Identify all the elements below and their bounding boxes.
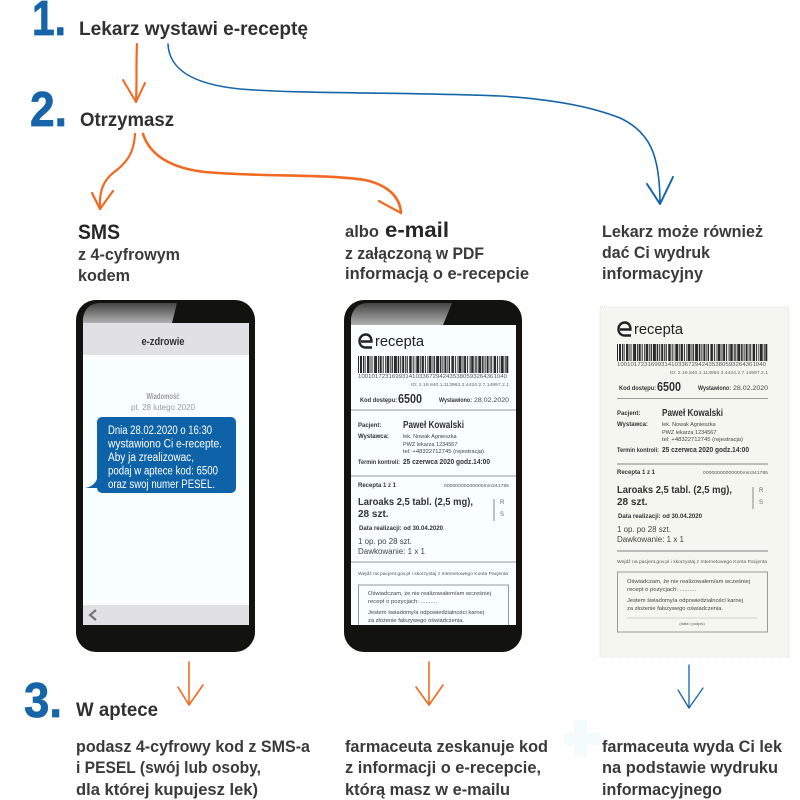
e-prescription document on paper: R: [759, 488, 764, 494]
text: pharmacy step for printout: [602, 738, 783, 799]
e-prescription document on phone: PWZ lekarza 1234567: [403, 442, 457, 448]
text: sender name: e-zdrowie: [142, 336, 184, 348]
icon: back chevron: [90, 610, 96, 620]
e-prescription document on phone: Paweł Kowalski: [403, 419, 464, 431]
text: pharmacy step for e-mail: farmaceuta zeskanuje kod: [345, 738, 548, 756]
heading: step 2: [30, 83, 174, 137]
text: pharmacy step for printout: farmaceuta wyda Ci lek: [602, 738, 783, 756]
heading: step 1: [32, 0, 308, 46]
e-prescription document on paper: S: [759, 500, 763, 506]
e-prescription document on phone: lek. Nowak Agnieszka: [403, 434, 457, 440]
e-prescription document on phone: 1 op. po 28 szt.: [358, 537, 412, 546]
text: pharmacy step for printout: informacyjnego: [602, 781, 722, 799]
heading: step 3: 3.: [24, 674, 62, 728]
e-prescription document on paper: za złożenie fałszywego oświadczenia.: [627, 606, 723, 612]
e-prescription document on paper: [617, 322, 769, 632]
e-prescription document on paper: tel: +48322712745 (rejestracja): [662, 437, 743, 443]
e-prescription document on paper: recept o pozycjach: ..........: [627, 587, 696, 593]
message bubble: podaj w aptece kod: 6500: [108, 466, 218, 478]
text: e-mail column heading: informacją o e-recepcie: [345, 265, 529, 283]
panel: phone with e-prescription PDF: [344, 300, 522, 652]
message bubble: Dnia 28.02.2020 o 16:30: [108, 425, 212, 437]
e-prescription document on paper: lek. Nowak Agnieszka: [662, 422, 716, 428]
text: SMS column heading: z 4-cyfrowym: [78, 246, 180, 264]
e-prescription document on phone: recepta: [375, 334, 425, 350]
e-prescription document on paper: Wejdź na pacjent.gov.pl i skorzystaj z Internetowego Konta Pacjenta: [617, 559, 768, 564]
e-prescription document on paper: 1 op. po 28 szt.: [617, 525, 671, 534]
text: pharmacy step for SMS: [76, 738, 311, 799]
arrow: step 1 to step 2: [123, 44, 145, 102]
e-prescription document on paper: PWZ lekarza 1234567: [662, 430, 716, 436]
e-prescription document on phone: za złożenie fałszywego oświadczenia.: [368, 618, 464, 624]
panel: phone with SMS: [76, 300, 255, 652]
e-prescription document on paper: 00000000000000mm341785: [703, 470, 769, 475]
e-prescription document on phone: 00000000000000mm341785: [444, 483, 510, 488]
e-prescription document on paper: Laroaks 2,5 tabl. (2,5 mg),: [617, 485, 732, 496]
e-prescription document on phone: Dawkowanie: 1 x 1: [358, 547, 426, 556]
text: pharmacy step for e-mail: [345, 738, 548, 799]
e-prescription document on paper: ID: 2.19.840.1.113993.3.4424.2.7.14997.2.1: [670, 370, 769, 375]
e-prescription document on paper: 28 szt.: [617, 497, 648, 508]
e-prescription document on paper: Wystawiono:: [698, 386, 731, 392]
heading: step 2: 2.: [30, 83, 67, 137]
e-prescription document on paper: Pacjent:: [617, 411, 640, 417]
e-prescription document on paper: Recepta 1 z 1: [617, 470, 656, 476]
text: printout column heading: Lekarz może również: [602, 223, 763, 241]
e-prescription document on paper: Paweł Kowalski: [662, 407, 723, 419]
e-prescription document on phone: Kod dostępu:: [360, 398, 397, 404]
heading: step 1: Lekarz wystawi e-receptę: [79, 19, 308, 40]
text: SMS column heading: [78, 221, 180, 285]
e-prescription document on paper: 25 czerwca 2020 godz.14:00: [662, 447, 749, 454]
e-prescription document on paper: Jestem świadomy/a odpowiedzialności karnej: [627, 598, 743, 604]
message bubble: wystawiono Ci e-recepte.: [107, 438, 222, 450]
e-prescription document on phone: ID: 2.19.840.1.113993.3.4424.2.7.14997.2.1: [411, 382, 510, 387]
text: pharmacy step for SMS: dla której kupujesz lek): [76, 781, 258, 799]
e-prescription document on paper: recepta: [634, 322, 684, 338]
e-prescription document on phone: 28 szt.: [358, 509, 389, 520]
decorative pale cross: [564, 720, 600, 757]
text: e-mail column heading: [345, 219, 529, 283]
message bubble: oraz swoj numer PESEL.: [108, 479, 215, 491]
arrow: to e-mail: [143, 134, 401, 213]
e-prescription document on phone: recept o pozycjach: ..........: [368, 599, 437, 605]
e-prescription document on phone: Oświadczam, że nie realizowałem/am wcześniej: [368, 591, 491, 597]
e-prescription document on paper: Termin kontroli:: [617, 448, 659, 454]
e-prescription document on paper: Kod dostępu:: [619, 386, 656, 392]
text: message date: [131, 391, 195, 412]
message bubble: Aby ja zrealizowac,: [108, 452, 194, 464]
e-prescription document on phone: 6500: [398, 392, 422, 406]
e-prescription document on paper: 10010172316993141033672942435380593264361040: [617, 362, 766, 368]
e-prescription document on phone: Wystawca:: [358, 434, 389, 440]
panel: printed information sheet: [600, 307, 789, 657]
e-prescription document on phone: 25 czerwca 2020 godz.14:00: [403, 459, 490, 466]
e-prescription document on paper: (data i podpis): [679, 621, 705, 626]
arrow: printout to pharmacy: [678, 665, 703, 708]
text: pharmacy step for SMS: podasz 4-cyfrowy kod z SMS-a: [76, 738, 311, 756]
text: message date: pt. 28 lutego 2020: [131, 402, 195, 412]
e-prescription document on paper: Data realizacji: od 30.04.2020: [618, 514, 703, 520]
message bubble: [85, 417, 236, 493]
e-prescription document on phone: Laroaks 2,5 tabl. (2,5 mg),: [358, 497, 473, 508]
text: SMS column heading: kodem: [78, 267, 130, 285]
e-prescription document on paper: Wystawca:: [617, 422, 648, 428]
e-prescription document on phone: S: [500, 512, 504, 518]
e-prescription document on phone: tel: +48322712745 (rejestracja): [403, 449, 484, 455]
text: e-mail column heading: e-mail: [385, 219, 449, 242]
e-prescription document on phone: [351, 334, 516, 645]
e-prescription document on phone: R: [500, 500, 505, 506]
e-prescription document on paper: Dawkowanie: 1 x 1: [617, 535, 685, 544]
text: printout column heading: [602, 223, 763, 283]
e-prescription document on phone: Jestem świadomy/a odpowiedzialności karnej: [368, 610, 484, 616]
text: e-mail column heading: albo: [345, 223, 379, 241]
text: pharmacy step for SMS: i PESEL (swój lub osoby,: [76, 759, 261, 777]
arrow: to SMS: [92, 134, 135, 209]
e-prescription document on phone: 10010172316993141033672942435380593264361040: [358, 374, 507, 380]
text: pharmacy step for e-mail: którą masz w e-mailu: [345, 781, 510, 799]
text: pharmacy step for printout: na podstawie wydruku: [602, 759, 778, 777]
text: message date: Wiadomość: [146, 391, 180, 401]
arrow: doctor to printout: [168, 44, 673, 204]
arrow: phone 1 to pharmacy: [178, 662, 203, 705]
e-prescription document on phone: Pacjent:: [358, 423, 381, 429]
e-prescription document on phone: Data realizacji: od 30.04.2020: [359, 526, 444, 532]
text: e-mail column heading: z załączoną w PDF: [345, 245, 484, 263]
e-prescription document on phone: Wejdź na pacjent.gov.pl i skorzystaj z Internetowego Konta Pacjenta: [358, 571, 509, 576]
text: pharmacy step for e-mail: z informacji o e-recepcie,: [345, 759, 541, 777]
e-prescription document on phone: Recepta 1 z 1: [358, 483, 397, 489]
heading: step 3: W aptece: [76, 700, 158, 721]
e-prescription document on phone: Wystawiono:: [439, 398, 472, 404]
heading: step 2: Otrzymasz: [80, 110, 174, 131]
text: printout column heading: informacyjny: [602, 265, 704, 283]
e-prescription document on phone: 28.02.2020: [474, 397, 509, 404]
arrow: phone 2 to pharmacy: [416, 662, 443, 705]
e-prescription document on phone: Termin kontroli:: [358, 460, 400, 466]
e-prescription document on paper: 28.02.2020: [733, 385, 768, 392]
e-prescription document on paper: 6500: [657, 380, 681, 394]
heading: step 3: [24, 674, 158, 728]
text: SMS column heading: SMS: [78, 221, 120, 244]
text: printout column heading: dać Ci wydruk: [602, 244, 711, 262]
e-prescription document on paper: Oświadczam, że nie realizowałem/am wcześniej: [627, 579, 750, 585]
